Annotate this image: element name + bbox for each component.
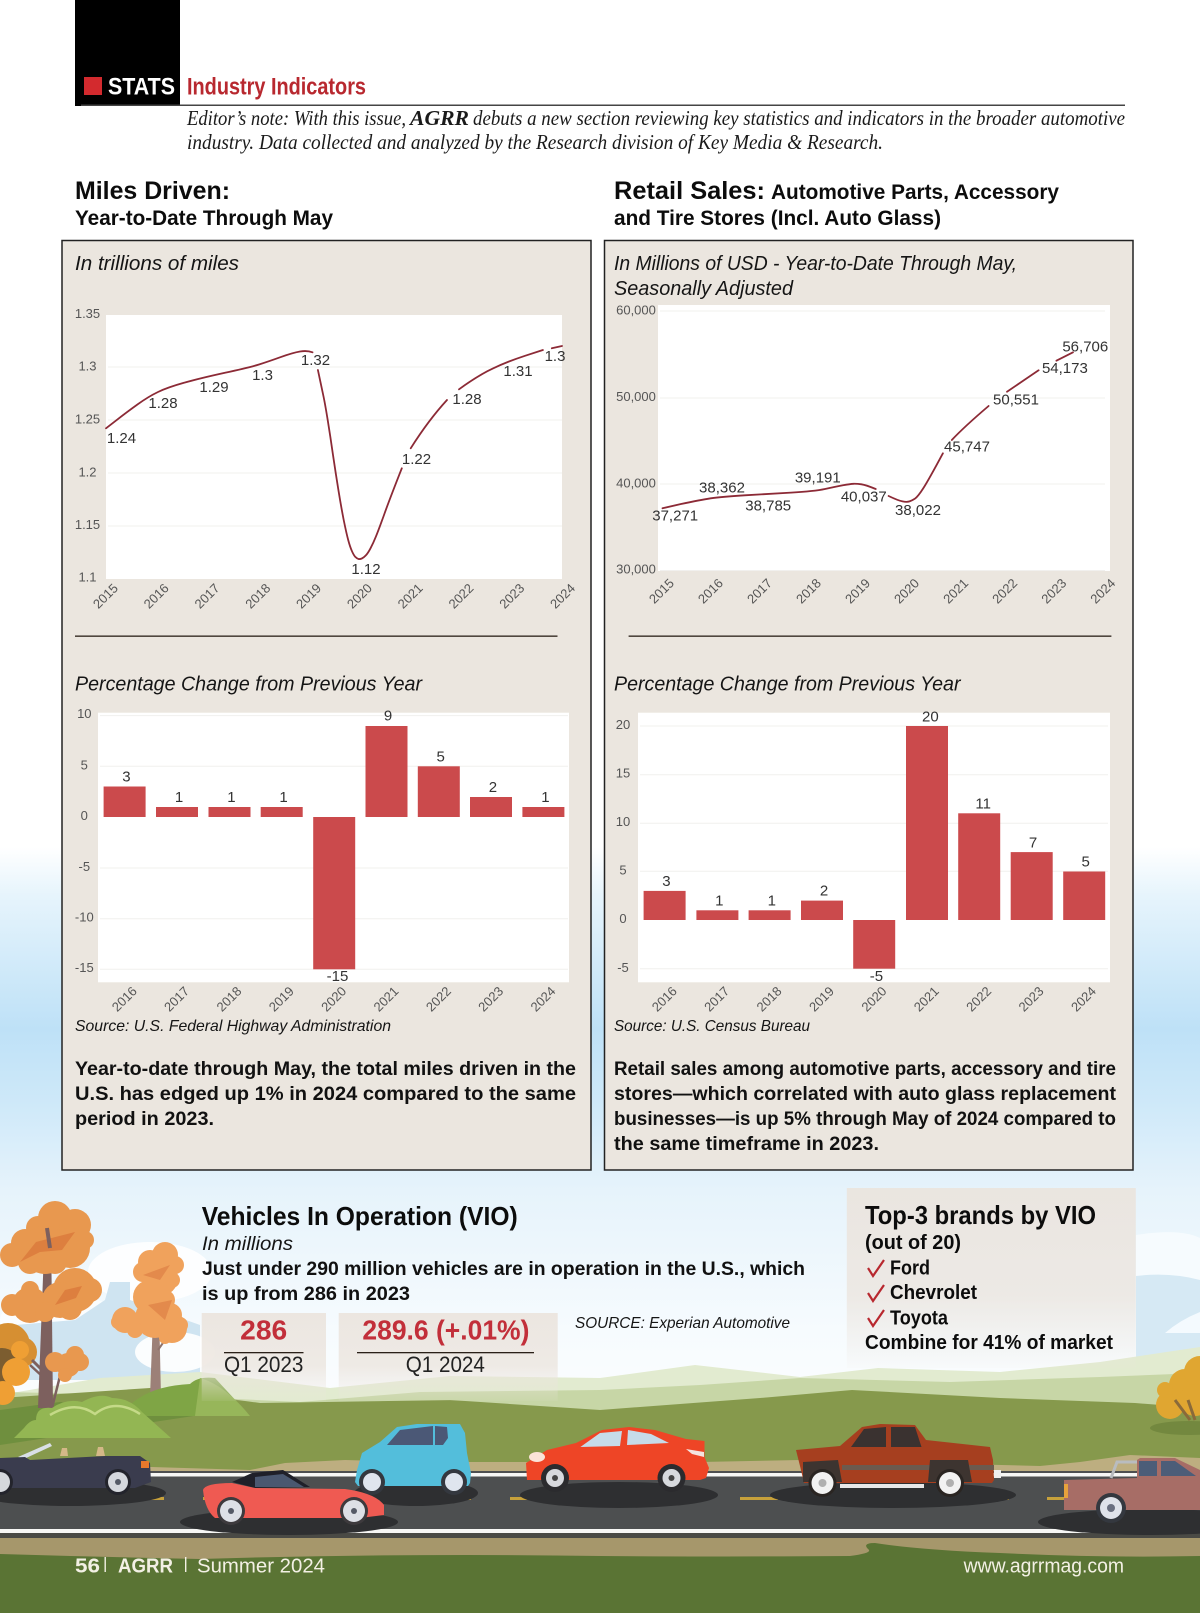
summary text: retail sales: the same timeframe in 2023. (614, 1134, 879, 1155)
data labels: 39,191 (795, 470, 841, 487)
section: vehicles in operation (202, 1201, 805, 1401)
summary text: miles driven: U.S. has edged up 1% in 2024 compared to the same (75, 1084, 576, 1105)
data labels: 1 (175, 789, 183, 806)
stat card: Q1 2024: Q1 2024 (406, 1352, 485, 1377)
subtitle: in trillions: In trillions of miles (75, 253, 239, 275)
y axis ticks (75, 306, 100, 585)
x axis years: 2022 (445, 580, 477, 612)
y axis ticks: 5 (81, 758, 88, 773)
y axis ticks: 20 (616, 717, 630, 732)
x axis years: 2022 (963, 983, 994, 1015)
y axis ticks: 0 (81, 808, 88, 823)
y axis ticks: 1.2 (78, 465, 97, 480)
divider (75, 636, 558, 637)
x axis years: 2018 (242, 580, 273, 612)
icon: right yellow tree (1150, 1356, 1200, 1435)
data labels: 1.24 (107, 430, 136, 447)
y axis ticks: 1.3 (78, 359, 97, 374)
bar chart: retail sales change (616, 708, 1110, 1015)
data labels: 1.22 (402, 451, 431, 468)
heading: Miles Driven: Year-to-Date Through May (75, 207, 333, 230)
heading: Retail Sales: and Tire Stores (Incl. Auto Glass) (614, 207, 941, 230)
summary text: retail sales: stores—which correlated with auto glass replacement (614, 1084, 1117, 1105)
sand strip above road (0, 1455, 1200, 1473)
x axis years: 2017 (191, 580, 223, 612)
editor's note: Editor’s note: With this issue, (186, 106, 406, 130)
x axis years: 2021 (940, 575, 971, 607)
panel: retail sales (604, 240, 1133, 1170)
icon: blue compact car (354, 1424, 478, 1506)
data labels (662, 708, 1090, 985)
x axis years (649, 983, 1099, 1015)
x axis years: 2020 (344, 580, 375, 612)
divider (629, 636, 1111, 637)
y axis ticks: 0 (619, 911, 627, 926)
source: FHWA: Source: U.S. Federal Highway Administration (75, 1018, 391, 1035)
footer: page and issue: AGRR (118, 1556, 174, 1578)
data labels (107, 348, 565, 578)
data labels: 1.29 (199, 379, 229, 396)
x axis years: 2019 (266, 983, 297, 1015)
data labels: 54,173 (1042, 360, 1088, 377)
data labels: 1 (541, 789, 550, 806)
icon: left yellow tree (0, 1323, 42, 1405)
source: census: Source: U.S. Census Bureau (614, 1018, 810, 1035)
x axis years: 2023 (1016, 983, 1047, 1015)
icon: check Ford (868, 1260, 884, 1276)
x axis years (646, 575, 1118, 607)
panel: top-3 brands: Toyota (890, 1308, 949, 1330)
grass (0, 1388, 1200, 1480)
panel: top-3 brands (847, 1188, 1136, 1368)
heading: Miles Driven (75, 177, 333, 230)
x axis years: 2024 (1068, 983, 1099, 1015)
icon: red sports car (180, 1470, 398, 1535)
data labels: 50,551 (993, 391, 1039, 408)
x axis years: 2016 (141, 580, 172, 612)
data labels: 1.28 (452, 391, 482, 408)
heading: Industry Indicators: Industry Indicators (187, 74, 366, 100)
icon: dark convertible (0, 1443, 166, 1506)
footer: website: www.agrrmag.com (963, 1556, 1124, 1578)
background landscape (0, 1232, 1200, 1613)
panel: top-3 brands: (out of 20) (865, 1232, 961, 1254)
data labels: 1.28 (148, 395, 178, 412)
x axis years: 2023 (1038, 575, 1069, 607)
y axis ticks: 30,000 (616, 562, 656, 577)
pale far hills (0, 1347, 1200, 1470)
panel: top-3 brands: Chevrolet (890, 1282, 977, 1304)
lower ground (0, 1536, 1200, 1613)
data labels: 1.3 (545, 348, 565, 365)
data labels: 1.31 (503, 363, 533, 380)
data labels: 38,022 (895, 502, 941, 519)
data labels: 1.32 (301, 352, 330, 369)
data labels: 1.12 (351, 561, 381, 578)
data labels: 38,362 (699, 480, 745, 497)
subtitle: in millions: In Millions of USD - Year-to-Date Through May, (614, 253, 1017, 275)
summary text: miles driven (75, 1059, 576, 1130)
summary text: miles driven: period in 2023. (75, 1109, 214, 1130)
bar chart: miles driven change (75, 706, 569, 1015)
data labels: 3 (122, 769, 131, 786)
icon: red pickup truck (770, 1424, 1016, 1508)
data labels: 1 (715, 892, 723, 909)
data labels: 1 (768, 892, 776, 909)
x axis years: 2016 (695, 575, 726, 607)
x axis years: 2019 (806, 983, 837, 1015)
editor's note: AGRR (408, 106, 469, 130)
icon: bushes (14, 1378, 250, 1438)
data labels: 9 (384, 708, 392, 725)
y axis ticks (616, 302, 656, 577)
x axis years: 2021 (911, 983, 942, 1015)
icon: pink pickup truck (1038, 1458, 1200, 1535)
VIO description (202, 1259, 805, 1305)
VIO description: is up from 286 in 2023 (202, 1284, 410, 1305)
data labels: 1 (279, 789, 288, 806)
y axis ticks: -10 (75, 910, 94, 925)
y axis ticks (75, 706, 94, 975)
x axis years: 2022 (423, 983, 454, 1015)
y axis ticks: 10 (77, 706, 92, 721)
y axis ticks: 40,000 (616, 476, 656, 491)
y axis ticks: 15 (616, 766, 630, 781)
y axis ticks: -5 (79, 859, 90, 874)
road (0, 1471, 1200, 1538)
data labels: 5 (437, 749, 445, 766)
x axis years: 2019 (293, 580, 324, 612)
heading: Retail Sales (614, 177, 1059, 230)
clouds and distant skyline (0, 1232, 1200, 1380)
y axis ticks: 5 (619, 863, 627, 878)
subtitle: in millions: Seasonally Adjusted (614, 278, 794, 300)
subtitle: percentage change: Percentage Change from Previous Year (614, 674, 962, 696)
x axis years: 2015 (646, 575, 677, 607)
middle hills (0, 1373, 1200, 1470)
subtitle: in millions: In millions (202, 1234, 294, 1255)
road centre dashes (0, 1497, 1162, 1500)
data labels: 7 (1029, 834, 1037, 851)
y axis ticks: 60,000 (616, 302, 656, 317)
x axis years (109, 983, 559, 1015)
icon: check Toyota (868, 1310, 884, 1326)
footer: page and issue (75, 1556, 325, 1578)
icon: orange sedan (520, 1427, 718, 1508)
x axis years: 2018 (213, 983, 245, 1015)
summary text: miles driven: Year-to-date through May, the total miles driven in the (75, 1059, 576, 1080)
heading: Miles Driven: Miles Driven: (75, 177, 230, 205)
footer: page and issue: Summer 2024 (197, 1556, 325, 1578)
x axis years: 2015 (90, 580, 121, 612)
data labels: 1.3 (252, 367, 273, 384)
x axis years: 2020 (891, 575, 922, 607)
x axis years: 2018 (793, 575, 824, 607)
stat card: Q1 2023: Q1 2023 (224, 1352, 303, 1377)
y axis ticks: -5 (617, 960, 629, 975)
y axis ticks: 10 (616, 814, 630, 829)
data labels: 20 (922, 708, 939, 725)
x axis years: 2016 (649, 983, 680, 1015)
data labels: 1 (227, 789, 236, 806)
data labels: 2 (820, 883, 828, 900)
y axis ticks: 1.25 (75, 412, 100, 427)
line chart: retail sales (616, 302, 1118, 607)
header: stats label: STATS (108, 74, 175, 100)
panel: top-3 brands: Ford (890, 1258, 930, 1280)
header: black tab (75, 0, 180, 106)
heading: Retail Sales: Retail Sales: (614, 177, 765, 205)
header: stats label (84, 74, 175, 100)
panel: miles driven (62, 240, 591, 1170)
panel: top-3 brands: Top-3 brands by VIO (865, 1200, 1096, 1230)
data labels (122, 708, 550, 985)
x axis years: 2022 (989, 575, 1020, 607)
subtitle: percentage change: Percentage Change from Previous Year (75, 674, 423, 696)
data labels: 56,706 (1062, 338, 1108, 355)
data labels (652, 338, 1108, 525)
summary text: retail sales: businesses—is up 5% through May of 2024 compared to (614, 1109, 1116, 1130)
VIO description: Just under 290 million vehicles are in operation in the U.S., which (202, 1259, 805, 1280)
summary text: retail sales: Retail sales among automotive parts, accessory and tire (614, 1059, 1116, 1080)
data labels: 5 (1082, 854, 1090, 871)
x axis years: 2021 (370, 983, 402, 1015)
y axis ticks: 50,000 (616, 389, 656, 404)
icon: check Chevrolet (868, 1285, 884, 1301)
y axis ticks (616, 717, 630, 975)
stat card: Q1 2024: 289.6 (+.01%) (362, 1314, 529, 1345)
heading: VIO: Vehicles In Operation (VIO) (202, 1201, 518, 1231)
x axis years: 2024 (1087, 575, 1118, 607)
data labels: 40,037 (841, 489, 887, 506)
data labels: 45,747 (944, 438, 990, 455)
x axis years: 2017 (744, 575, 775, 607)
editor's note (186, 106, 1125, 154)
panel: top-3 brands: Combine for 41% of market (865, 1332, 1113, 1354)
footer: page and issue: 56 (75, 1556, 100, 1578)
data labels: 3 (662, 873, 671, 890)
icon: second autumn tree (111, 1242, 188, 1397)
header rule (81, 104, 1125, 106)
stat card: Q1 2024 (339, 1313, 558, 1401)
x axis years: 2024 (527, 983, 559, 1015)
y axis ticks: 1.1 (78, 570, 97, 585)
editor's note: debuts a new section reviewing key statistics and indicators in the broader automotive (473, 106, 1125, 130)
x axis years: 2020 (318, 983, 349, 1015)
x axis years: 2023 (496, 580, 527, 612)
source: Experian: SOURCE: Experian Automotive (575, 1315, 790, 1332)
stat card: Q1 2023: 286 (240, 1314, 287, 1345)
x axis years: 2023 (475, 983, 506, 1015)
x axis years: 2019 (842, 575, 873, 607)
data labels: 11 (975, 796, 991, 813)
editor's note: industry. Data collected and analyzed by the Research division of Key Media & Research. (187, 130, 883, 154)
line chart: miles driven (75, 306, 578, 612)
x axis years: 2017 (701, 983, 732, 1015)
summary text: retail sales (614, 1059, 1117, 1155)
data labels: 2 (489, 779, 497, 796)
x axis years: 2020 (858, 983, 889, 1015)
x axis years: 2017 (161, 983, 192, 1015)
x axis years (90, 580, 578, 612)
x axis years: 2018 (754, 983, 785, 1015)
y axis ticks: 1.15 (75, 517, 100, 532)
x axis years: 2021 (395, 580, 426, 612)
data labels: 37,271 (652, 508, 698, 525)
data labels: -15 (327, 968, 348, 985)
y axis ticks: -15 (75, 960, 94, 975)
y axis ticks: 1.35 (75, 306, 100, 321)
x axis years: 2016 (109, 983, 140, 1015)
data labels: -5 (870, 968, 883, 985)
data labels: 38,785 (745, 498, 791, 515)
x axis years: 2024 (547, 580, 578, 612)
subtitle: in millions (614, 253, 1017, 300)
stat card: Q1 2023 (202, 1313, 326, 1401)
icon: tall autumn tree (0, 1201, 102, 1408)
heading: Retail Sales: Automotive Parts, Accessory (771, 181, 1059, 204)
